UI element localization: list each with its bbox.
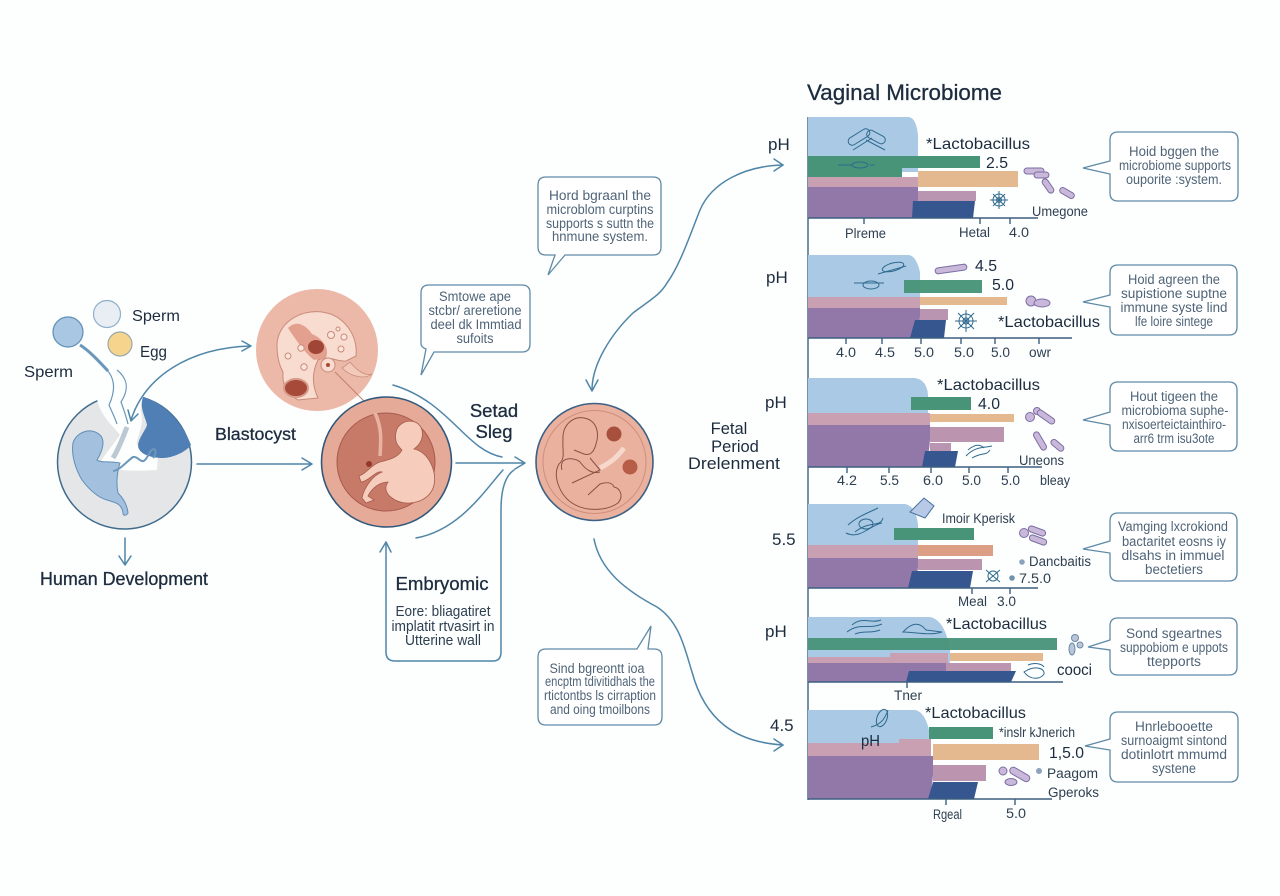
chart 5: cooci [1057,662,1092,679]
callout: right 2: Hoid agreen the [1128,272,1220,287]
chart 3: 5.5 [880,473,899,488]
arrow: curved arrow from uterus to early embryo [128,341,251,421]
heading: stage label: Sleg [475,421,513,442]
chart 6: Paagom [1047,766,1098,781]
callout: right 2: supistione suptne [1121,286,1227,301]
callout: right 3: nxisoerteictainthiro- [1122,417,1226,432]
chart 3: 5.0 [1001,473,1020,488]
chart 2: 5.0 [954,345,974,360]
callout: lower middle: and oing tmoilbons [550,702,650,717]
callout: right 1: ouporite :system. [1126,172,1222,187]
chart 1: 2.5 [986,155,1008,172]
label: sperm left: Sperm [24,364,73,381]
callout: right 4 [1083,513,1237,581]
chart 1: *Lactobacillus [926,136,1030,153]
callout: top middle [538,177,661,275]
chart 5: *Lactobacillus [946,616,1047,633]
callout: lower middle: rtictontbs ls cirraption [544,688,656,703]
callout: top middle: supports s suttn the [546,216,654,231]
callout: right 2 [1083,265,1237,335]
chart 2: 4.5 [975,258,997,275]
callout: right 5: ttepports [1147,654,1201,669]
label: sperm upper: Sperm [132,308,180,325]
callout: right 6: dotinlotrt mmumd [1121,747,1227,762]
chart 3 [765,377,1070,488]
callout: right 4: Vamging lxcrokiond [1118,519,1228,534]
callout: lower middle: encptm tdivitidhals the [545,674,655,689]
callout: right 5: suppobiom e uppots [1120,640,1228,655]
callout: second middle: stcbr/ areretione [428,303,522,318]
panel: embryo circle [322,397,452,527]
chart 5: pH [765,622,787,641]
panel: early embryo circle [58,370,192,529]
panel: embryonic box: Utterine wall [405,633,481,649]
callout: second middle: deel dk Immtiad [430,317,522,332]
chart 4: 7.5.0 [1019,571,1051,586]
chart 2: pH [766,268,788,287]
heading: human development: Human Development [40,569,208,589]
callout: right 1 [1083,132,1238,201]
chart 1: Plreme [845,226,886,241]
icon: sperm and egg cells [53,300,132,371]
chart 4 [772,498,1091,609]
heading: blastocyst: Blastocyst [215,424,296,444]
heading: stage label [470,400,518,442]
chart 1: Hetal [959,225,990,240]
chart 4: 3.0 [997,594,1016,609]
chart 2: 5.0 [992,277,1014,294]
arrows: converging to fetal circle [393,385,525,538]
icon: uterus circle [256,289,383,420]
chart 2: 5.0 [991,345,1010,360]
chart 3: *Lactobacillus [937,377,1040,394]
callout: right 1: microbiome supports [1119,158,1231,173]
side label: fetal period: Drelenment [688,455,780,473]
chart 2: *Lactobacillus [998,314,1100,331]
chart 4: 5.5 [772,530,796,549]
chart 6: *inslr kJnerich [999,725,1075,740]
callout: right 3 [1083,382,1237,451]
chart 3: Uneons [1019,453,1064,468]
chart 1 [768,117,1088,241]
chart 6 [770,705,1099,822]
callout: right 6: surnoaigmt sintond [1121,733,1227,748]
chart 6: pH [861,733,880,750]
callout: right 6 [1085,712,1238,782]
chart 1: Umegone [1032,204,1088,219]
chart 6: Gperoks [1048,785,1099,800]
side label: fetal period: Period [711,438,759,456]
callout: right 3: microbioma suphe- [1122,403,1228,418]
callout: top middle: Hord bgraanl the [549,188,651,203]
chart 6: 5.0 [1006,806,1026,821]
arrow: down to human development [119,538,131,565]
chart 2: 4.5 [875,345,895,360]
chart 2: 5.0 [914,345,934,360]
heading: stage label: Setad [470,400,518,421]
callout: right 6: Hnrlebooette [1135,719,1213,734]
callout: right 5 [1088,618,1237,675]
chart 6: 4.5 [770,716,794,735]
chart 5 [765,616,1092,703]
callout: right 3: arr6 trm isu3ote [1134,431,1214,446]
callout: right 6: systene [1152,761,1196,776]
callout: right 4: bectetiers [1145,562,1203,577]
chart 6: 1,5.0 [1049,745,1084,762]
chart 1: pH [768,135,790,154]
panel: embryonic box [380,470,514,661]
arrow: early embryo to second circle [197,458,312,470]
chart 3: pH [765,393,787,412]
callout: second middle: Smtowe ape [439,289,511,304]
callout: right 5: Sond sgeartnes [1126,626,1222,641]
chart 2: owr [1029,345,1051,360]
callout: right 2: immune syste lind [1120,300,1228,315]
callout: right 1: Hoid bggen the [1129,144,1219,159]
panel: embryonic box: implatit rtvasirt in [392,619,494,635]
callout: lower middle [538,626,662,725]
arrow: lower curve to last chart [594,539,783,751]
callout: right 3: Hout tigeen the [1130,389,1218,404]
chart 4: Dancbaitis [1029,554,1091,569]
title: Vaginal Microbiome [807,80,1002,105]
chart 2: 4.0 [836,345,856,360]
panel: embryonic box: Embryomic [396,573,488,594]
side label: fetal period [688,420,780,473]
label: egg: Egg [140,344,167,361]
callout: second middle [421,285,530,375]
chart 2 [766,255,1100,360]
callout: top middle: hnmune system. [552,229,648,244]
chart 5: Tner [894,688,923,703]
chart 3: 5.0 [962,473,981,488]
chart 6: Rgeal [933,807,962,822]
callout: lower middle: Sind bgreontt ioa [550,661,645,676]
arrow: long curve to microbiome [586,159,783,391]
chart 1: 4.0 [1009,225,1029,240]
chart 3: 4.0 [978,396,1000,413]
chart 6: *Lactobacillus [925,705,1026,722]
chart 4: Imoir Kperisk [942,511,1015,526]
chart 4: Meal [958,594,987,609]
callout: right 4: bactaritet eosns iy [1122,534,1226,549]
panel: embryonic box: Eore: bliagatiret [396,604,490,620]
panel: fetal circle [536,404,653,520]
callout: top middle: microblom curptins [546,202,654,217]
callout: right 2: lfe loire sintege [1135,314,1213,329]
callout: second middle: sufoits [456,331,494,346]
chart 3: 4.2 [837,473,857,488]
chart 3: 6.0 [923,473,943,488]
callout: right 4: dlsahs in immuel [1122,548,1224,563]
chart 3: bleay [1040,473,1070,488]
side label: fetal period: Fetal [711,420,747,438]
axis: chart spine [807,117,809,800]
